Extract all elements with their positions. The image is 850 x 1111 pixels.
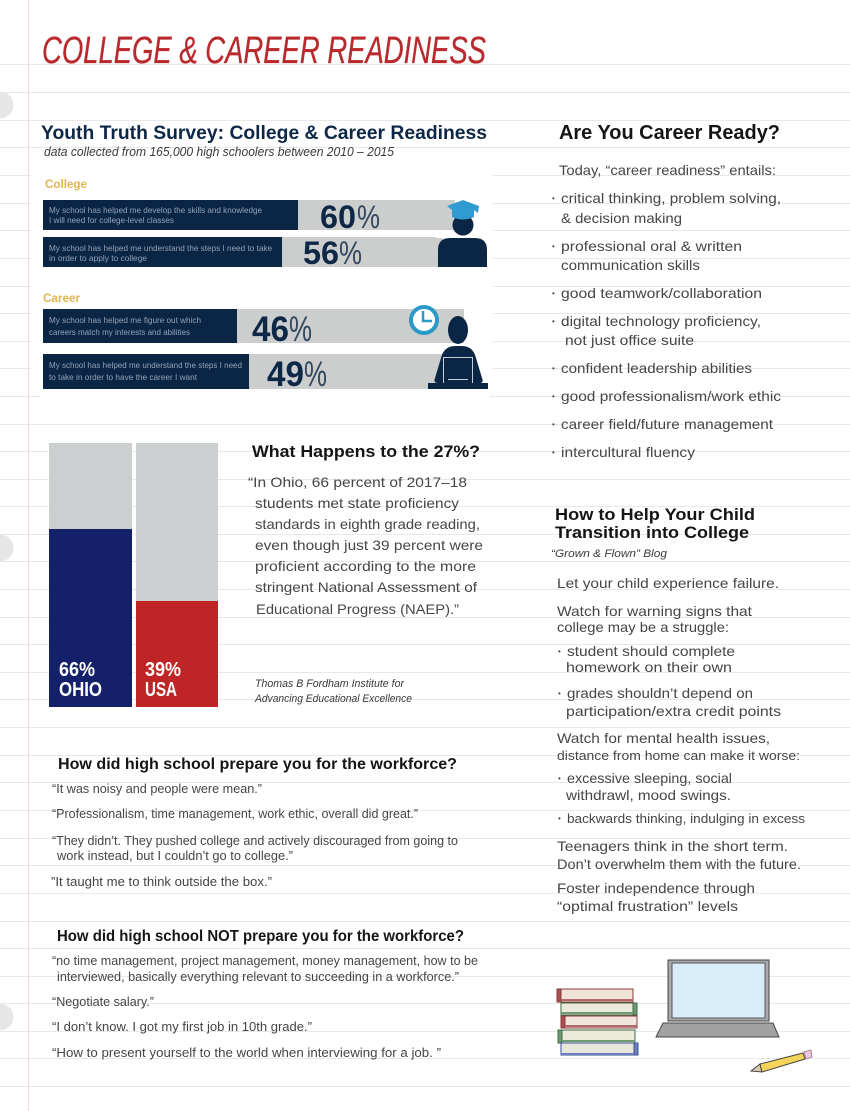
not prepared quotes xyxy=(52,954,478,1060)
survey subtitle: data collected from 165,000 high schoolers between 2010 – 2015 xyxy=(44,144,395,159)
help advice text: • xyxy=(558,647,561,656)
bar: career steps 49%: % xyxy=(304,355,327,394)
not prepared quotes: “How to present yourself to the world when interviewing for a job. ” xyxy=(52,1046,441,1060)
not prepared quotes: interviewed, basically everything relevant to succeeding in a workforce.” xyxy=(57,970,459,984)
bar: career steps 49%: to take in order to have the career I want xyxy=(49,372,198,382)
prepared heading: How did high school prepare you for the workforce? xyxy=(58,756,457,773)
quote text: students met state proficiency xyxy=(255,495,459,511)
icon: person at laptop xyxy=(428,316,488,389)
icon: laptop xyxy=(656,960,779,1037)
bar: college skills 60%: My school has helped me develop the skills and knowledge xyxy=(49,205,262,215)
career ready heading: Are You Career Ready? xyxy=(559,122,780,144)
career ready list: career field/future management xyxy=(561,416,773,432)
bar: career interests 46%: My school has helped me figure out which xyxy=(49,315,201,325)
quote text: proficient according to the more xyxy=(255,558,476,574)
career ready list: & decision making xyxy=(561,210,682,226)
bar chart: Ohio vs USA proficiency: OHIO xyxy=(59,679,102,701)
career ready list: good professionalism/work ethic xyxy=(561,388,781,404)
prepared quotes: “It was noisy and people were mean.” xyxy=(52,782,262,796)
bar: college steps 56%: 56 xyxy=(303,235,339,271)
bar: career steps 49%: My school has helped me understand the steps I need xyxy=(49,360,242,370)
title: COLLEGE & CAREER READINESS xyxy=(42,30,486,72)
panel: how to help your child xyxy=(551,505,806,914)
help heading: How to Help Your Child xyxy=(555,505,755,524)
prepared quotes: ”It taught me to think outside the box.” xyxy=(51,875,272,889)
career ready list xyxy=(552,190,781,460)
career ready intro: Today, “career readiness” entails: xyxy=(559,162,776,178)
bar: college skills 60% xyxy=(43,199,455,235)
help advice text: Let your child experience failure. xyxy=(557,575,779,591)
help advice text: Teenagers think in the short term. xyxy=(557,838,788,854)
bar: college skills 60%: I will need for college-level classes xyxy=(49,215,174,225)
career ready list: • xyxy=(552,364,555,373)
help advice text: • xyxy=(558,814,561,823)
bar: career interests 46% xyxy=(43,309,464,349)
career ready list: • xyxy=(552,289,555,298)
career ready list: confident leadership abilities xyxy=(561,360,752,376)
not prepared quotes: “Negotiate salary.” xyxy=(52,995,154,1009)
prepared quotes xyxy=(51,782,458,889)
help advice text: Watch for mental health issues, xyxy=(557,730,770,746)
career ready list: • xyxy=(552,317,555,326)
career ready list: • xyxy=(552,194,555,203)
help advice text: student should complete xyxy=(567,643,735,659)
career ready list: critical thinking, problem solving, xyxy=(561,190,781,206)
panel: high school prepared xyxy=(51,756,458,889)
college label: College xyxy=(45,177,87,191)
career ready list: intercultural fluency xyxy=(561,444,695,460)
not prepared heading: How did high school NOT prepare you for the workforce? xyxy=(57,928,464,945)
not prepared quotes: “I don’t know. I got my first job in 10th grade.” xyxy=(52,1020,312,1034)
help advice text: grades shouldn’t depend on xyxy=(567,685,753,701)
help advice text: “optimal frustration” levels xyxy=(557,898,738,914)
help heading xyxy=(555,505,755,542)
bar: career interests 46%: 46 xyxy=(252,310,289,349)
survey heading: Youth Truth Survey: College & Career Readiness xyxy=(41,123,487,144)
quote text: stringent National Assessment of xyxy=(255,579,477,595)
help advice text xyxy=(557,575,806,914)
prepared quotes: work instead, but I couldn’t go to college.” xyxy=(56,849,293,863)
help advice text: withdrawl, mood swings. xyxy=(565,787,731,803)
blog source: “Grown & Flown” Blog xyxy=(551,548,668,560)
quote text: standards in eighth grade reading, xyxy=(255,516,480,532)
quote text: “In Ohio, 66 percent of 2017–18 xyxy=(248,474,467,490)
bar: college skills 60%: % xyxy=(357,199,380,235)
bar: career steps 49% xyxy=(43,354,443,394)
help advice text: distance from home can make it worse: xyxy=(557,748,800,763)
career label: Career xyxy=(43,291,80,305)
career ready list: good teamwork/collaboration xyxy=(561,285,762,301)
help advice text: Foster independence through xyxy=(557,880,755,896)
icon: graduate xyxy=(436,200,490,267)
panel: high school did not prepare xyxy=(52,928,478,1060)
bar: career steps 49%: 49 xyxy=(267,355,304,394)
career ready list: professional oral & written xyxy=(561,238,742,254)
career ready list: • xyxy=(552,242,555,251)
career ready list: communication skills xyxy=(561,257,700,273)
quote text: even though just 39 percent were xyxy=(255,537,483,553)
career ready list: not just office suite xyxy=(565,332,694,348)
bar chart: Ohio vs USA proficiency: 39% xyxy=(145,659,181,681)
icon: stack of books xyxy=(557,989,638,1055)
help advice text: • xyxy=(558,689,561,698)
help advice text: Watch for warning signs that xyxy=(557,603,752,619)
quote text: Educational Progress (NAEP).” xyxy=(256,601,459,617)
prepared quotes: “They didn’t. They pushed college and actively discouraged from going to xyxy=(52,834,458,848)
help advice text: excessive sleeping, social xyxy=(567,770,732,786)
bar: career interests 46%: careers match my interests and abilities xyxy=(49,327,190,337)
help advice text: Don’t overwhelm them with the future. xyxy=(557,856,801,872)
bar chart: Ohio vs USA proficiency xyxy=(49,443,218,707)
bar chart: Ohio vs USA proficiency: USA xyxy=(145,679,177,701)
career ready list: • xyxy=(552,448,555,457)
bar: college steps 56% xyxy=(43,235,443,271)
help advice text: participation/extra credit points xyxy=(566,703,781,719)
help advice text: homework on their own xyxy=(566,659,732,675)
quote source: Thomas B Fordham Institute for xyxy=(255,678,405,690)
quote source xyxy=(254,678,412,705)
panel: what happens to the 27% xyxy=(248,442,483,705)
help advice text: • xyxy=(558,774,561,783)
career ready list: • xyxy=(552,420,555,429)
bar: college skills 60%: 60 xyxy=(320,199,356,235)
bar: college steps 56%: in order to apply to college xyxy=(49,253,147,263)
bar: career interests 46%: % xyxy=(289,310,312,349)
bar chart: Ohio vs USA proficiency: 66% xyxy=(59,659,95,681)
career ready list: • xyxy=(552,392,555,401)
career ready list: digital technology proficiency, xyxy=(561,313,761,329)
quote source: Advancing Educational Excellence xyxy=(254,693,412,705)
help advice text: college may be a struggle: xyxy=(557,619,729,635)
help advice text: backwards thinking, indulging in excess xyxy=(567,811,806,826)
quote text xyxy=(248,474,483,617)
not prepared quotes: “no time management, project management, money management, how to be xyxy=(52,954,478,968)
panel: youth truth survey xyxy=(41,123,490,394)
icon: pencil xyxy=(751,1050,812,1072)
prepared quotes: “Professionalism, time management, work ethic, overall did great.” xyxy=(52,807,418,821)
27% heading: What Happens to the 27%? xyxy=(252,442,480,461)
help heading: Transition into College xyxy=(555,523,749,542)
bar: college steps 56%: % xyxy=(339,235,362,271)
bar: college steps 56%: My school has helped me understand the steps I need to take xyxy=(49,243,272,253)
panel: career ready xyxy=(552,122,781,460)
icon: clock xyxy=(411,307,437,333)
